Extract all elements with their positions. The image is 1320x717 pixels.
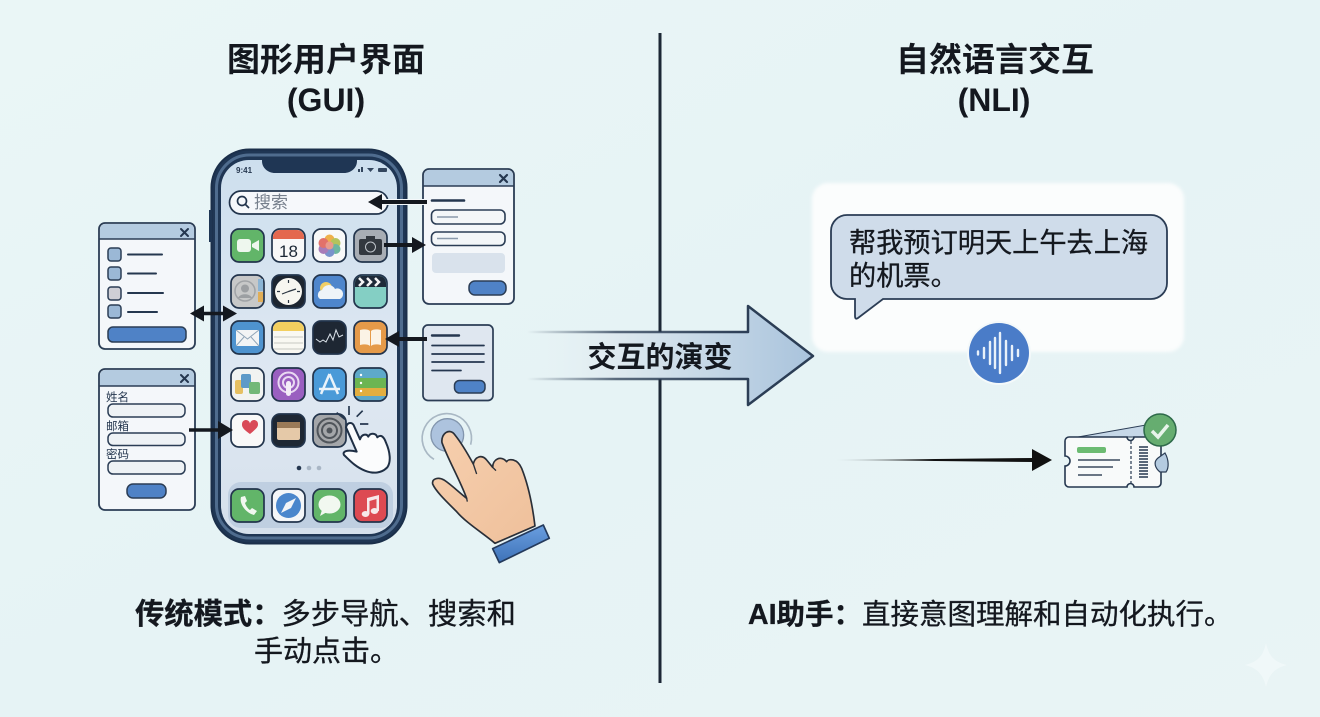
small tapping hand bbox=[337, 406, 390, 473]
cuff bbox=[493, 525, 549, 563]
caption: NLI: AI助手：直接意图理解和自动化执行。 bbox=[748, 599, 1233, 631]
dock: safari bbox=[272, 489, 305, 522]
app: contacts bbox=[231, 275, 264, 308]
caption: GUI bbox=[135, 598, 516, 668]
window: details bbox=[423, 169, 514, 304]
center divider bbox=[658, 33, 662, 683]
search bar bbox=[230, 191, 388, 214]
search bar: 搜索 bbox=[254, 193, 288, 212]
app: wallet stripes bbox=[354, 368, 387, 401]
app: wallet bbox=[272, 414, 305, 447]
arrow: card to books bbox=[385, 331, 427, 347]
title: NLI abbreviation: (NLI) bbox=[958, 82, 1030, 118]
arrow label: 交互的演变 bbox=[587, 341, 733, 374]
arrow: result bbox=[836, 449, 1052, 471]
arrow: evolution bbox=[527, 306, 813, 405]
large hand bbox=[433, 431, 549, 563]
title: GUI abbreviation: (GUI) bbox=[287, 82, 365, 118]
icon: ticket bbox=[1065, 414, 1176, 487]
phone notch bbox=[262, 159, 357, 173]
app: photos bbox=[313, 229, 346, 262]
arrow: form to health bbox=[189, 421, 233, 439]
speech text: 的机票。 bbox=[849, 260, 958, 291]
app: health bbox=[231, 414, 264, 447]
checklist rows bbox=[108, 248, 163, 318]
app: podcasts bbox=[272, 368, 305, 401]
app: notes bbox=[272, 321, 305, 354]
app: clips bbox=[354, 275, 387, 308]
form label: name: 姓名 bbox=[106, 390, 129, 404]
arrow: camera to window bbox=[384, 237, 426, 253]
arrow: double headed bbox=[190, 306, 237, 322]
caption: GUI: 传统模式：多步导航、搜索和 bbox=[135, 598, 516, 631]
speech bubble bbox=[831, 215, 1167, 319]
window: checklist bbox=[99, 223, 195, 349]
title: NLI: 自然语言交互 bbox=[896, 41, 1094, 78]
phone side button bbox=[209, 210, 212, 242]
app: mail bbox=[231, 321, 264, 354]
check badge bbox=[1144, 414, 1176, 446]
touch ripple bbox=[422, 414, 471, 459]
phone bbox=[209, 150, 406, 544]
form label: email: 邮箱 bbox=[106, 419, 129, 433]
status icons bbox=[358, 167, 387, 172]
dock: phone bbox=[231, 489, 264, 522]
dock: messages bbox=[313, 489, 346, 522]
panel: voice request bbox=[812, 183, 1184, 352]
app: facetime bbox=[231, 229, 264, 262]
app: maps bbox=[231, 368, 264, 401]
title: GUI: 图形用户界面 bbox=[227, 41, 425, 78]
app: books bbox=[354, 321, 387, 354]
form label: password: 密码 bbox=[106, 447, 129, 461]
dock bbox=[228, 482, 393, 528]
app: app store bbox=[313, 368, 346, 401]
page dots bbox=[297, 466, 321, 470]
speech text: 帮我预订明天上午去上海 bbox=[849, 227, 1148, 258]
dock: music bbox=[354, 489, 387, 522]
icon: voice waveform bbox=[967, 321, 1031, 385]
watermark sparkle bbox=[1245, 643, 1287, 687]
app: settings bbox=[313, 414, 346, 447]
app: clock bbox=[272, 275, 305, 308]
app: calendar bbox=[272, 229, 305, 262]
status time: 9:41 bbox=[236, 166, 253, 175]
window: form bbox=[99, 369, 195, 510]
arrow: window to search bbox=[368, 194, 427, 210]
speech text bbox=[849, 227, 1148, 291]
app: stocks bbox=[313, 321, 346, 354]
caption: GUI: 手动点击。 bbox=[254, 635, 399, 668]
app: camera bbox=[354, 229, 387, 262]
window: document card bbox=[423, 325, 493, 400]
app: calendar: 18 bbox=[279, 242, 298, 261]
app: weather bbox=[313, 275, 346, 308]
